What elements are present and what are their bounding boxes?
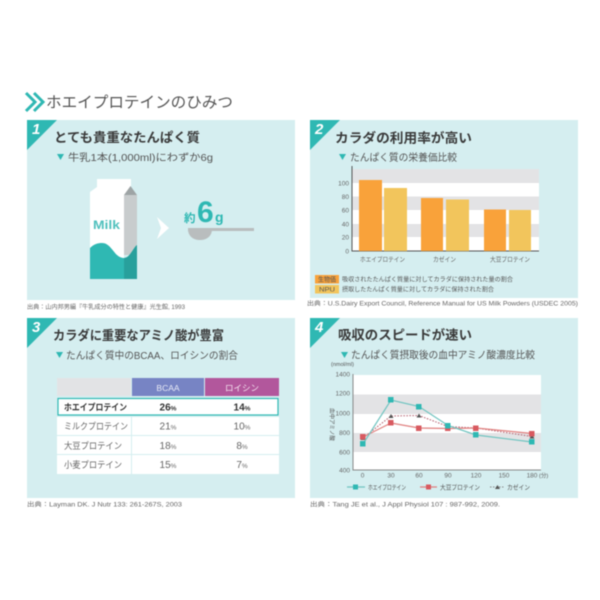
y axis labels: 20 — [342, 234, 349, 242]
x axis labels: 0 — [361, 472, 365, 480]
y axis labels: 100 — [338, 180, 349, 188]
x axis labels: 120 — [471, 472, 482, 480]
y axis labels — [338, 180, 349, 256]
panel 4 subtitle: たんぱく質摂取後の血中アミノ酸濃度比較 — [351, 348, 535, 362]
panel 2 subtitle: たんぱく質の栄養価比較 — [350, 151, 457, 164]
x axis labels: 30 — [387, 472, 395, 480]
bars — [359, 180, 531, 251]
y axis labels: 40 — [342, 222, 349, 228]
x axis labels — [361, 472, 548, 480]
y axis labels: 1400 — [336, 372, 350, 378]
panel 2: utilization rate — [310, 120, 578, 298]
panel 1 title: とても貴重なたんぱく質 — [54, 130, 200, 145]
panel 1 number badge — [27, 120, 57, 150]
x axis labels — [360, 254, 530, 264]
icon: measuring spoon — [188, 228, 254, 240]
panel 3 title: カラダに重要なアミノ酸が豊富 — [53, 328, 224, 343]
row: soy: 大豆プロテイン — [64, 440, 122, 451]
panel 4 number badge: 4 — [314, 319, 324, 336]
row: whey: 26% — [160, 402, 177, 414]
y axis labels: 60 — [342, 208, 349, 214]
row: soy: 18% — [160, 441, 177, 452]
chart legend: 摂取したたんぱく質量に対してカラダに保持された割合 — [342, 286, 494, 294]
y axis labels: 1200 — [336, 390, 350, 398]
x axis labels: 大豆プロテイン — [490, 254, 530, 264]
series: whey — [360, 397, 534, 446]
x axis labels: 150 — [499, 472, 510, 480]
panel 1 subtitle — [57, 151, 213, 164]
x axis labels: カゼイン — [433, 254, 456, 264]
panel 3 citation: 出典：Layman DK. J Nutr 133: 261-267S, 2003 — [27, 500, 183, 508]
x axis labels: 60 — [415, 472, 423, 480]
row: milk: ミルクプロテイン — [64, 422, 128, 432]
table header — [57, 378, 279, 396]
y axis labels: 1000 — [336, 410, 350, 418]
panel 2 number badge: 2 — [314, 121, 324, 138]
panel 3 subtitle: たんぱく質中のBCAA、ロイシンの割合 — [66, 349, 238, 362]
x axis labels: 180 — [527, 472, 538, 480]
row: wheat — [57, 455, 279, 474]
y axis labels: 400 — [339, 468, 350, 474]
amount label: about 6 g: 約 — [184, 211, 196, 225]
row: milk — [57, 417, 279, 435]
panel 1 citation: 出典：山内邦男編『牛乳成分の特性と健康』光生館, 1993 — [27, 303, 186, 311]
x axis labels: 90 — [444, 472, 452, 480]
y axis labels: 0 — [345, 248, 349, 256]
chart legend: NPU — [319, 286, 335, 294]
series: soy — [360, 420, 534, 440]
row: wheat: 15% — [160, 460, 177, 471]
table header: BCAA — [156, 383, 180, 393]
panel 1 number badge: 1 — [32, 121, 40, 138]
x axis labels: ホエイプロテイン — [360, 256, 405, 264]
table: BCAA and leucine — [57, 378, 279, 474]
panel 1: precious protein — [27, 120, 295, 300]
heading text: ホエイプロテインのひみつ — [46, 94, 233, 112]
icon: arrow — [157, 217, 169, 239]
y axis labels: 血中アミノ酸 — [328, 408, 336, 441]
icon: milk carton: Milk — [93, 220, 121, 232]
panel 1 subtitle: 牛乳1本(1,000ml)にわずか6g — [68, 151, 213, 164]
panel 3: amino acids — [27, 318, 295, 498]
panel 3 number badge — [27, 318, 57, 348]
panel 3 number badge: 3 — [32, 319, 41, 336]
panel 2 number badge — [310, 120, 340, 150]
x axis labels: (分) — [539, 472, 548, 480]
row: whey — [58, 398, 278, 415]
row: whey: 14% — [234, 402, 251, 414]
line chart legend: ホエイプロテイン — [368, 484, 406, 492]
line chart legend: カゼイン — [507, 482, 530, 492]
series: casein — [360, 414, 534, 440]
page heading — [26, 93, 233, 112]
amount label: about 6 g — [184, 196, 224, 229]
chart legend: 生物価 — [318, 274, 336, 284]
panel 4: absorption speed — [310, 318, 578, 498]
line chart: blood amino acid concentration — [328, 362, 548, 480]
row: soy: 8% — [236, 441, 248, 452]
line chart legend — [347, 482, 530, 492]
chart legend: 吸収されたたんぱく質量に対してカラダに保持された量の割合 — [342, 276, 513, 284]
y axis labels — [328, 362, 354, 474]
panel 4 title: 吸収のスピードが速い — [338, 328, 472, 342]
y axis labels: 800 — [339, 430, 350, 437]
panel 4 citation: 出典：Tang JE et al., J Appl Physiol 107 : 987-992, 2009. — [310, 500, 500, 508]
table header: ロイシン — [225, 383, 259, 393]
row: wheat: 7% — [236, 460, 248, 471]
row: soy — [57, 436, 279, 454]
panel 2 title: カラダの利用率が高い — [335, 130, 472, 146]
chart legend — [315, 274, 513, 294]
row: wheat: 小麦プロテイン — [64, 459, 122, 470]
row: whey: ホエイプロテイン — [64, 402, 127, 412]
line chart legend: 大豆プロテイン — [440, 482, 480, 492]
y axis labels: 600 — [339, 450, 350, 456]
y axis labels: 80 — [342, 194, 349, 201]
row: milk: 21% — [160, 422, 177, 432]
amount label: about 6 g: g — [215, 209, 224, 225]
panel 2 citation: 出典：U.S.Dairy Export Council, Reference Manual for US Milk Powders (USDEC 2005) — [307, 300, 578, 308]
panel 4 number badge — [310, 318, 340, 348]
amount label: about 6 g: 6 — [197, 196, 214, 229]
y axis labels: (nmol/ml) — [331, 362, 354, 368]
row: milk: 10% — [234, 422, 251, 432]
icon: double chevron — [26, 93, 43, 111]
bar chart: nutritional value — [338, 166, 539, 264]
icon: milk carton — [90, 179, 137, 279]
